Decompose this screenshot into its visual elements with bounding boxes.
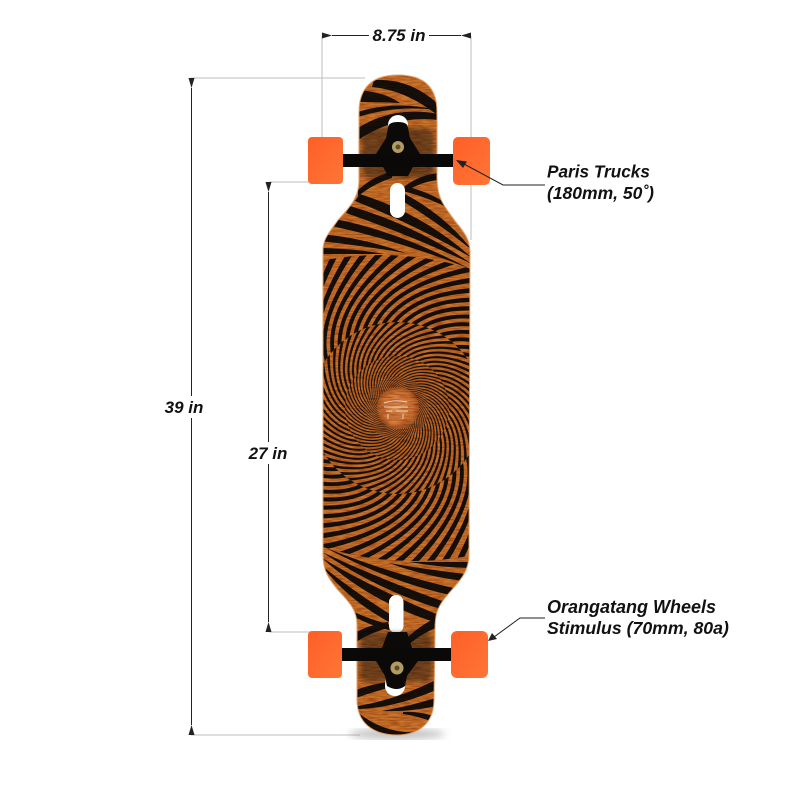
top fan of stripes	[324, 186, 470, 268]
truck baseplate shadow	[360, 632, 432, 682]
innermost spiral ring	[365, 376, 429, 440]
deck wood base	[320, 70, 475, 740]
outer spiral ring	[324, 255, 470, 561]
center wood disc	[377, 387, 419, 429]
top truck	[308, 122, 490, 185]
leader arrow: wheels	[494, 618, 545, 637]
truck hanger	[376, 632, 418, 689]
wheels label: Stimulus (70mm, 80a)	[547, 618, 729, 638]
truck hanger	[376, 122, 420, 176]
wheels label: Orangatang Wheels	[547, 597, 716, 617]
arrow: overall length	[190, 88, 192, 725]
truck axle	[343, 154, 455, 167]
leader arrow: trucks	[464, 164, 545, 185]
overall length label: 39 in	[165, 398, 203, 417]
arrow: width	[332, 34, 461, 36]
trucks label: Paris Trucks	[547, 162, 650, 182]
wood grain overlay	[320, 70, 475, 740]
extension lines	[191, 36, 471, 735]
wheelbase label: 27 in	[248, 444, 287, 463]
wheel top right	[453, 137, 490, 185]
longboard deck	[324, 76, 470, 734]
callout: wheels	[488, 597, 729, 641]
trucks label: (180mm, 50˚)	[547, 183, 654, 203]
deck edge	[323, 75, 470, 735]
inner spiral ring	[345, 356, 449, 460]
truck axle	[342, 648, 452, 661]
width label: 8.75 in	[373, 26, 425, 45]
kingpin bolt	[392, 141, 404, 153]
wheel bottom left	[308, 631, 342, 678]
truck baseplate shadow	[362, 128, 434, 178]
kingpin bolt	[390, 662, 404, 674]
bottom fan of stripes	[324, 547, 468, 630]
mounting slots	[385, 115, 408, 696]
arrow: wheelbase	[268, 192, 270, 622]
overall length dimension	[160, 88, 208, 725]
wheel bottom right	[451, 631, 488, 678]
tail stripes	[356, 618, 436, 737]
center logo	[384, 401, 408, 419]
wheel top left	[308, 137, 343, 184]
ground shadow	[349, 729, 445, 739]
nose stripes	[358, 80, 438, 196]
wheelbase dimension	[244, 192, 292, 622]
middle spiral ring	[324, 322, 470, 494]
bottom truck	[308, 631, 488, 689]
width dimension	[332, 26, 461, 46]
callout: trucks	[456, 160, 654, 203]
